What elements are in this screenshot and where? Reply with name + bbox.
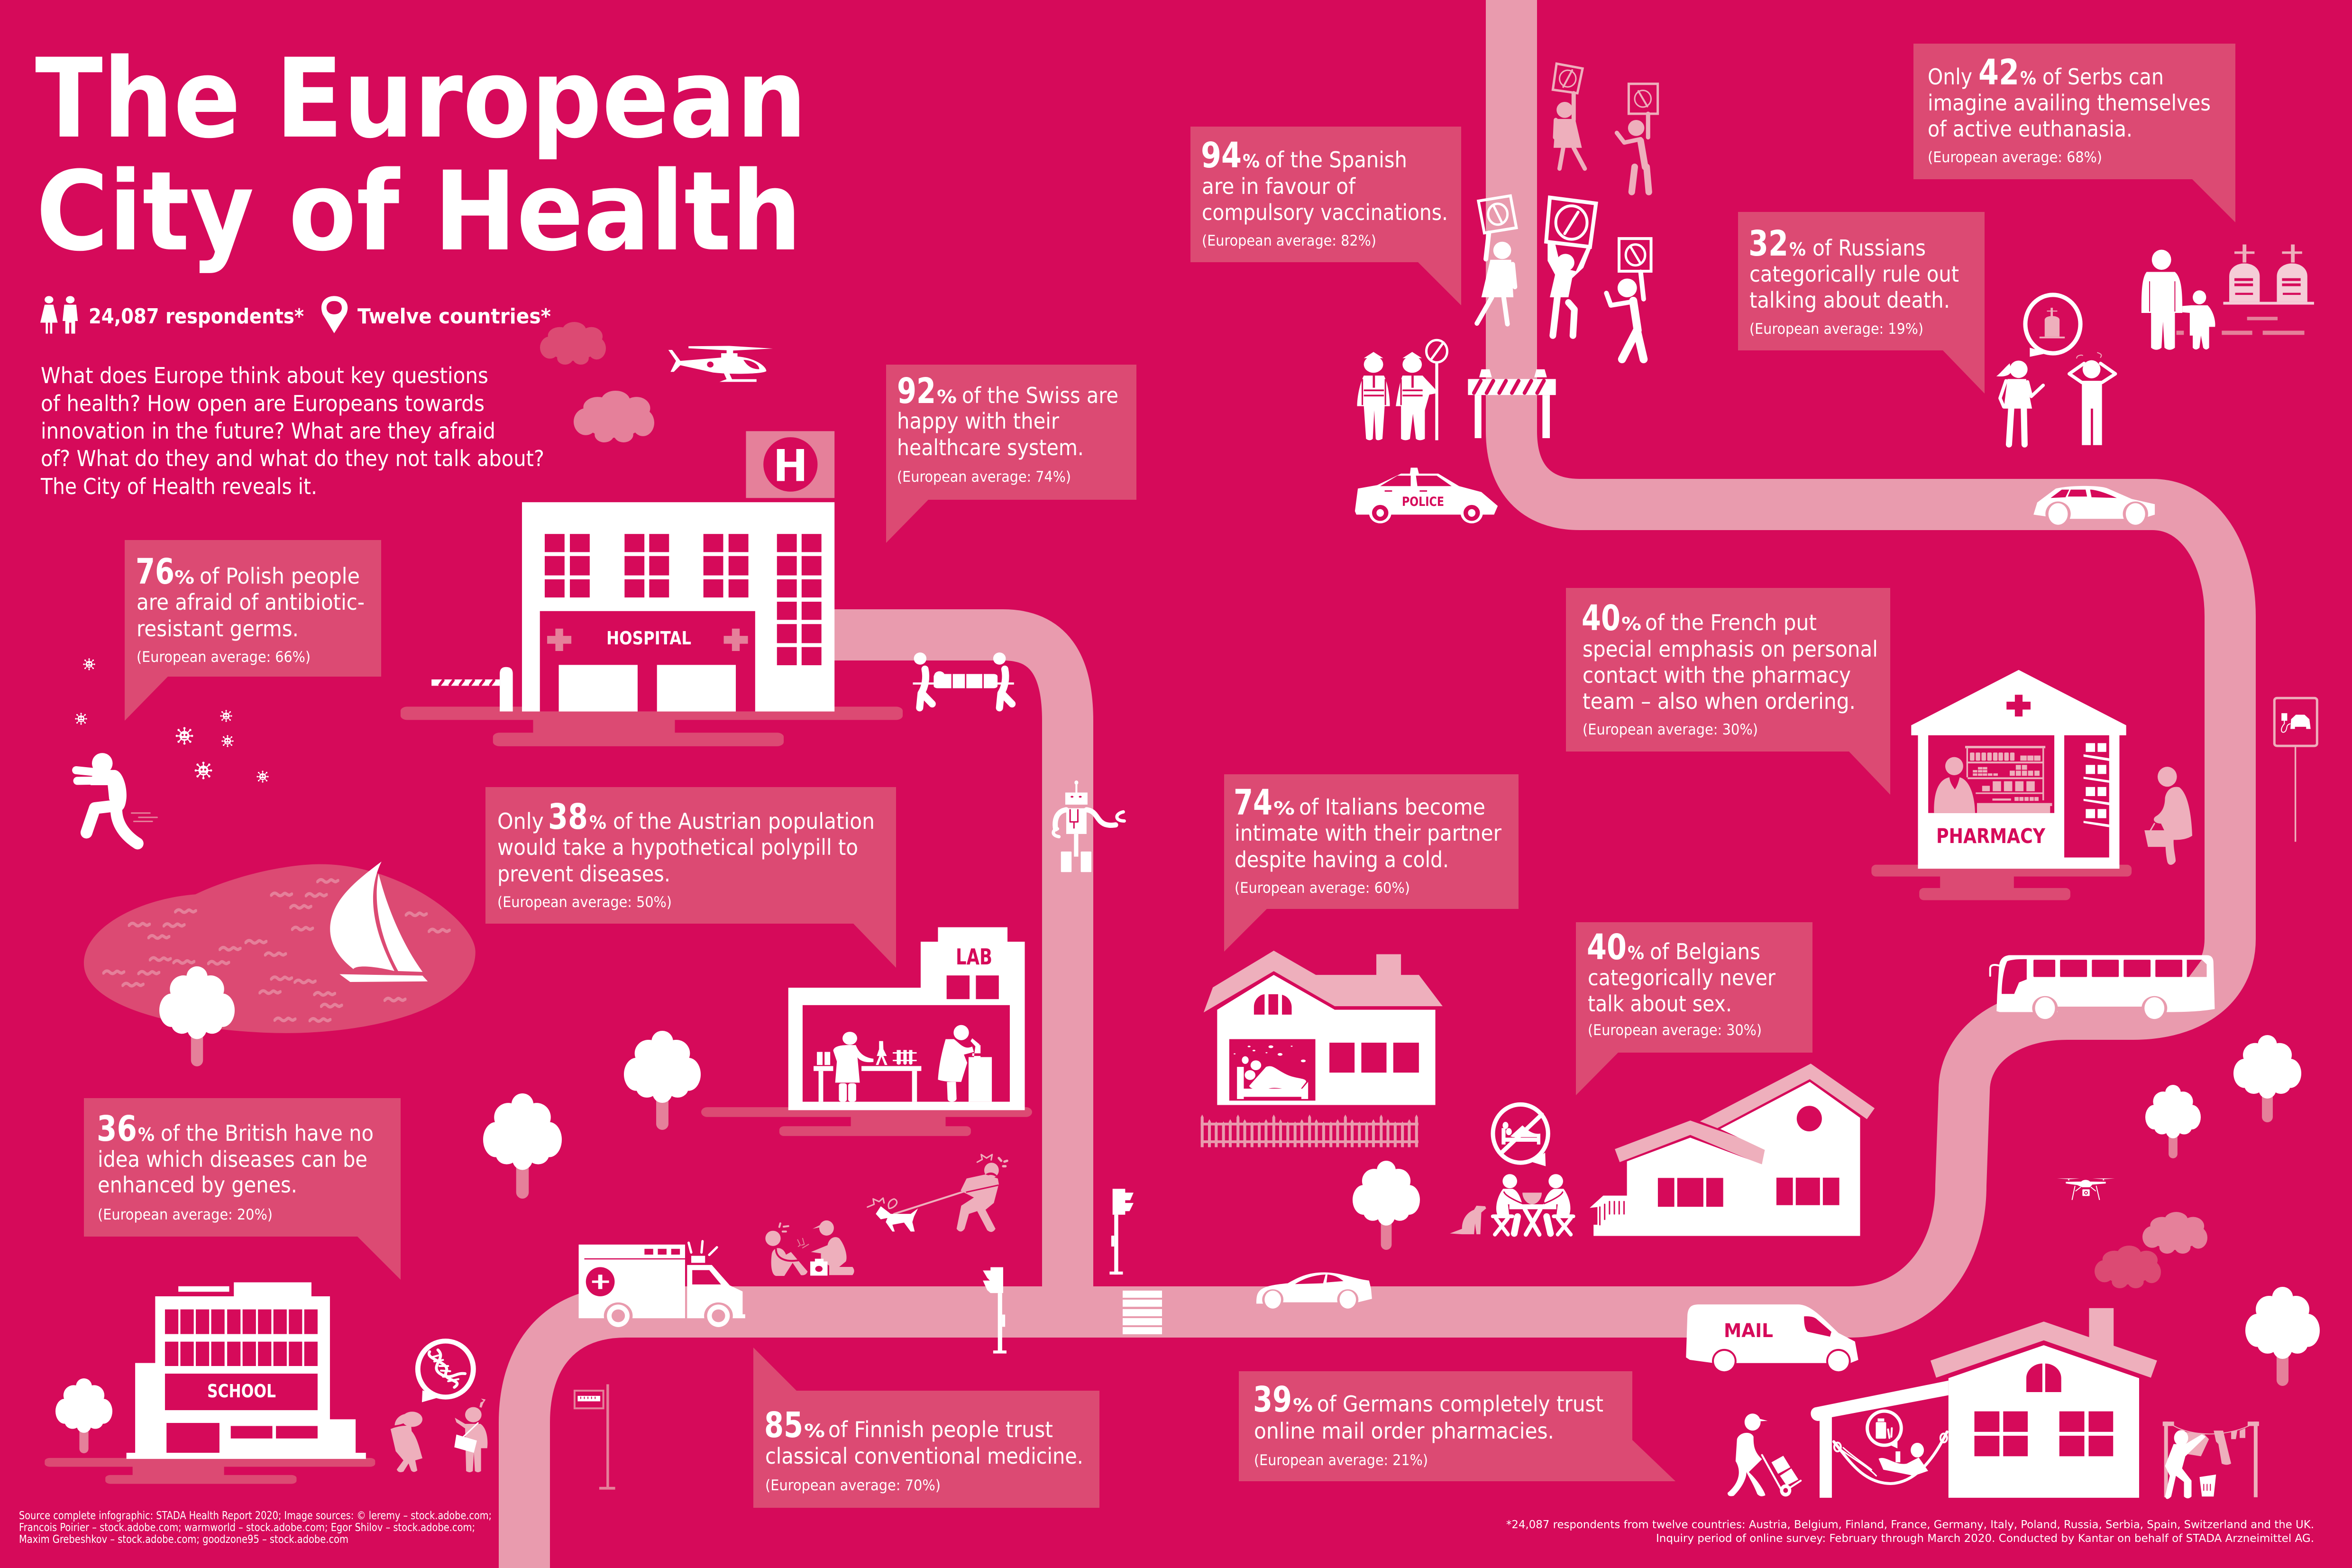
ground <box>1871 865 2132 900</box>
callout: Austrian: 38 <box>548 797 588 837</box>
no-sex bubble <box>1493 1104 1548 1166</box>
mail label: MAIL <box>1724 1320 1773 1342</box>
callout: Polish: % <box>174 567 194 588</box>
title: City of Health <box>36 148 802 275</box>
callout: German: (European average: 21%) <box>1254 1452 1428 1469</box>
callout: British: 36 <box>97 1109 137 1149</box>
callout: French: contact with the pharmacy <box>1583 662 1851 688</box>
school <box>45 1282 375 1484</box>
ambulance <box>579 1241 745 1329</box>
callout: German: online mail order pharmacies. <box>1254 1418 1554 1444</box>
callout: Serbs: Only <box>1928 64 1972 90</box>
callout: French: 40 <box>1582 598 1620 639</box>
bottom house <box>1811 1308 2157 1498</box>
text: countries: Twelve countries* <box>357 304 551 329</box>
callout: Serbs <box>1913 44 2235 222</box>
callout: British: (European average: 20%) <box>98 1206 273 1223</box>
callout: Swiss: % <box>937 386 957 407</box>
callout: Polish: resistant germs. <box>137 616 299 642</box>
callout: British: of the British have no <box>161 1120 374 1146</box>
callout: French: % <box>1621 614 1641 634</box>
callout: Belgian: talk about sex. <box>1588 991 1732 1017</box>
white car upper road <box>2033 486 2155 526</box>
footer: survey note <box>1506 1519 2314 1545</box>
white protesters <box>1477 196 1651 359</box>
callout: Russians: 32 <box>1748 223 1788 264</box>
footer: sources: Maxim Grebeshkov – stock.adobe.com; goodzone95 – stock.adobe.com <box>19 1533 348 1546</box>
footer: survey note: *24,087 respondents from twelve countries: Austria, Belgium, Finland, France, Germany, Italy, Poland, Russia, Serbia, Spain, Switzerland and the UK. <box>1506 1519 2314 1531</box>
callout: Russians: (European average: 19%) <box>1749 321 1923 338</box>
callout: German: of Germans completely trust <box>1317 1391 1603 1417</box>
icon: drone <box>2057 1178 2115 1200</box>
shelves <box>1965 746 2052 813</box>
intro text: What does Europe think about key questions <box>41 363 488 388</box>
windows <box>545 534 822 665</box>
family at graves <box>2142 245 2314 350</box>
police label: POLICE <box>1402 495 1444 509</box>
hammock <box>1834 1432 1947 1484</box>
lab <box>701 927 1032 1136</box>
footer: survey note: Inquiry period of online survey: February through March 2020. Conducted by Kantar on behalf of STADA Arzneimittel AG. <box>1656 1532 2314 1545</box>
callout: Spanish: % <box>1243 151 1260 172</box>
trees <box>55 1031 2320 1453</box>
icon: location pin <box>321 296 348 333</box>
robot <box>1053 780 1124 872</box>
text: respondents: 24,087 respondents* <box>89 304 304 329</box>
intro text: of health? How open are Europeans towards <box>41 391 485 416</box>
picket fence <box>1201 1115 1419 1147</box>
callout: Polish <box>125 540 381 721</box>
callout: Belgian: categorically never <box>1588 965 1775 990</box>
callout: British <box>84 1098 401 1280</box>
mail van <box>1686 1304 1858 1373</box>
callout: French: (European average: 30%) <box>1583 721 1758 738</box>
callout: Spanish: (European average: 82%) <box>1202 232 1376 249</box>
scientist at microscope <box>938 1025 992 1102</box>
death conversation pair <box>1996 295 2115 447</box>
laundry figure <box>2163 1421 2259 1499</box>
road network <box>524 0 2230 1568</box>
callout: Swiss: happy with their <box>897 408 1059 434</box>
callout: Spanish: compulsory vaccinations. <box>1202 200 1448 225</box>
callout: Italian: despite having a cold. <box>1235 847 1449 872</box>
building body <box>522 502 834 712</box>
hospital <box>401 431 903 746</box>
callout: Austrian: Only <box>497 808 544 834</box>
couple eating and dog <box>1450 1174 1575 1235</box>
callout: Austrian: (European average: 50%) <box>497 894 672 911</box>
callout: French: of the French put <box>1645 610 1817 635</box>
crosses <box>547 629 748 651</box>
callout: Finnish: (European average: 70%) <box>765 1477 941 1494</box>
waves <box>103 880 449 1021</box>
callout: Swiss <box>886 365 1136 543</box>
callout: Italian: (European average: 60%) <box>1235 880 1410 897</box>
callout: Swiss: of the Swiss are <box>962 383 1118 408</box>
callout: Swiss: (European average: 74%) <box>897 468 1071 486</box>
callout: Spanish: 94 <box>1201 135 1242 176</box>
porch <box>1811 1381 1949 1498</box>
side windows <box>2084 743 2109 827</box>
white car <box>1256 1273 1372 1310</box>
viruses <box>75 658 269 783</box>
callout: Serbs: 42 <box>1978 52 2019 93</box>
callout: Polish: 76 <box>136 551 174 592</box>
callout: Russians: % <box>1789 239 1806 260</box>
intro text <box>40 363 544 499</box>
doors <box>559 665 736 712</box>
callout: Belgian <box>1576 922 1812 1095</box>
callout: British: % <box>138 1124 155 1145</box>
first aid pair <box>765 1220 854 1276</box>
sailboat <box>330 862 428 982</box>
school label: SCHOOL <box>207 1381 276 1402</box>
callout: French: special emphasis on personal <box>1583 636 1878 662</box>
callout: Italian: % <box>1273 798 1295 819</box>
pharmacy label: PHARMACY <box>1936 825 2046 848</box>
tree: lake <box>159 966 235 1066</box>
clouds upper left <box>540 322 654 442</box>
clouds lower right <box>2095 1212 2207 1288</box>
callout: Austrian: of the Austrian population <box>613 808 875 834</box>
callout: Spanish <box>1190 127 1461 305</box>
callout: German: 39 <box>1253 1379 1292 1420</box>
callout: British: idea which diseases can be <box>98 1146 367 1172</box>
callout: Spanish: of the Spanish <box>1265 147 1407 173</box>
pharmacy <box>1871 670 2132 900</box>
bus <box>1990 955 2215 1020</box>
callout: French: team – also when ordering. <box>1583 688 1856 714</box>
callout: Finnish: of Finnish people trust <box>828 1417 1053 1442</box>
protesters <box>1477 64 1658 359</box>
lab label: LAB <box>956 944 992 970</box>
callout: Austrian: % <box>589 812 606 833</box>
Italian house <box>1204 951 1443 1105</box>
stretcher bearers <box>913 652 1014 708</box>
crosswalk <box>1123 1291 1162 1334</box>
intro text: The City of Health reveals it. <box>40 474 317 499</box>
callout: Italian: of Italians become <box>1299 794 1485 820</box>
callout: Finnish: classical conventional medicine. <box>765 1443 1083 1469</box>
lake <box>84 862 476 1033</box>
callout: Italian <box>1224 774 1519 952</box>
callout: Serbs: (European average: 68%) <box>1928 149 2102 166</box>
helipad sign <box>746 431 834 498</box>
building <box>1911 670 2126 869</box>
icon: respondents <box>40 296 78 334</box>
EV charging sign <box>2274 698 2317 842</box>
callout: Belgian: 40 <box>1587 927 1627 968</box>
icon: helicopter <box>668 346 773 382</box>
scientist at bench <box>814 1032 921 1102</box>
callout: Finnish <box>753 1348 1099 1508</box>
callout: Serbs: imagine availing themselves <box>1928 90 2211 116</box>
intro text: innovation in the future? What are they afraid <box>41 418 495 444</box>
title <box>35 36 807 275</box>
dog walker <box>868 1155 1007 1232</box>
running figure <box>76 753 157 844</box>
callout: Italian: 74 <box>1234 782 1272 823</box>
callout: Belgian: of Belgians <box>1650 939 1760 964</box>
callout: Swiss: healthcare system. <box>897 435 1084 460</box>
footer: sources: Francois Poirier – stock.adobe.com; warmworld – stock.adobe.com; Egor Shilov – stock.adobe.com; <box>19 1522 475 1534</box>
footer: sources <box>19 1510 492 1546</box>
callout: Serbs: of Serbs can <box>2042 64 2164 90</box>
callout: Belgian: % <box>1628 943 1644 963</box>
callout: Austrian <box>485 787 896 968</box>
intro text: of? What do they and what do they not talk about? <box>41 446 544 471</box>
callout: Serbs: % <box>2020 68 2036 89</box>
callout: Russians: of Russians <box>1812 235 1926 261</box>
building <box>127 1282 366 1459</box>
bus stop sign <box>575 1385 615 1490</box>
barrier <box>431 667 513 712</box>
pharmacist <box>1934 757 1975 813</box>
delivery man <box>1728 1413 1801 1496</box>
callout: Finnish: 85 <box>764 1405 803 1446</box>
hospital label: HOSPITAL <box>606 628 691 649</box>
footer: sources: Source complete infographic: STADA Health Report 2020; Image sources: © leremy – stock.adobe.com; <box>19 1510 492 1522</box>
bedroom scene <box>1234 1045 1308 1099</box>
callout: Austrian: would take a hypothetical polypill to <box>497 834 858 860</box>
traffic lights <box>983 1189 1134 1354</box>
callout: Italian: intimate with their partner <box>1235 820 1501 846</box>
callout: Polish: are afraid of antibiotic- <box>137 589 365 615</box>
callout: German: % <box>1293 1395 1313 1416</box>
callout: Russians: categorically rule out <box>1749 261 1959 287</box>
ground <box>45 1458 375 1484</box>
ground <box>701 1107 1032 1136</box>
road barrier <box>1468 369 1556 438</box>
callout: Spanish: are in favour of <box>1202 174 1356 199</box>
building <box>788 927 1025 1110</box>
callout: Belgian: (European average: 30%) <box>1588 1022 1762 1039</box>
windows <box>165 1310 318 1453</box>
thought bubble <box>1867 1411 1901 1445</box>
title: The European <box>35 36 807 163</box>
entrance <box>540 611 755 712</box>
pharmacy customer <box>2144 767 2192 865</box>
callout: Russians <box>1738 212 1985 394</box>
callout: British: enhanced by genes. <box>98 1172 297 1198</box>
students with DNA bubble <box>391 1339 487 1472</box>
callout: Swiss: 92 <box>897 371 936 412</box>
callout: Serbs: of active euthanasia. <box>1928 116 2132 142</box>
callout: French <box>1566 588 1890 795</box>
police car <box>1355 468 1498 523</box>
callout: Finnish: % <box>804 1421 825 1441</box>
police officers <box>1357 340 1447 440</box>
callout: Russians: talking about death. <box>1749 287 1950 313</box>
callout: Austrian: prevent diseases. <box>497 861 670 887</box>
pale protesters <box>1553 64 1658 192</box>
Belgian house <box>1590 1064 1875 1236</box>
callout: German <box>1239 1371 1675 1481</box>
ground <box>401 706 903 746</box>
callout: Polish: (European average: 66%) <box>137 649 311 666</box>
callout: Polish: of Polish people <box>200 563 360 589</box>
